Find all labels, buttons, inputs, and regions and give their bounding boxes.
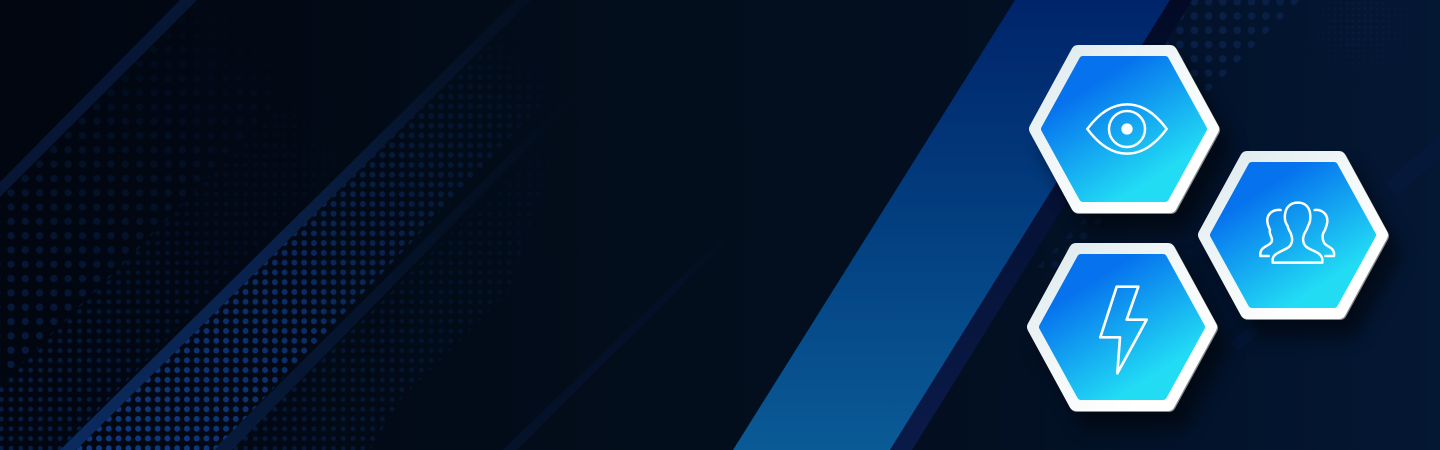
hexagon: lightning bolt [1034,250,1222,422]
hexagon: eye [1036,52,1224,224]
diagonal stripes: left [0,0,732,450]
dot pattern: small patch beside bolt hexagon [1035,212,1108,270]
dot pattern: fine dim halftone field [0,145,296,450]
large diagonal band [733,0,1170,450]
dot pattern: upper right fine [1330,2,1390,52]
dot pattern: upper right coarse [1135,0,1300,95]
icon: eye [1087,104,1167,154]
dot pattern: coarse halftone field [0,47,243,380]
faint diagonal stripes: right [1232,135,1440,350]
icon: lightning bolt [1100,287,1147,373]
icon: people [1260,203,1334,263]
dot pattern: bright halftone between stripes [76,59,530,450]
dark diagonal band [890,0,1192,450]
dot pattern: dim halftone beyond second stripe [234,194,522,450]
hexagon: people [1205,158,1393,330]
